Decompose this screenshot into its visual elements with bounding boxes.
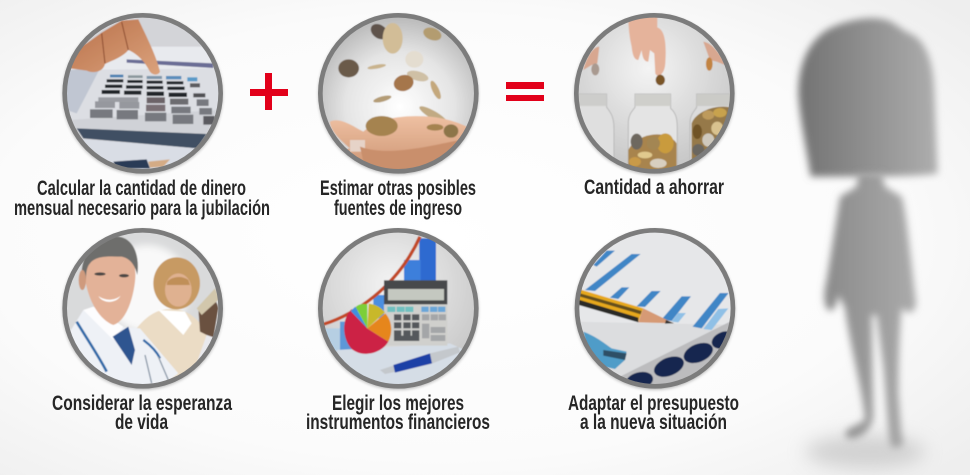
label: considerar: de vida <box>115 410 169 434</box>
label: adaptar <box>568 391 739 434</box>
label: adaptar: Adaptar el presupuesto <box>568 391 739 415</box>
photo: hands dropping coins into jars <box>573 10 740 177</box>
panel: cantidad a ahorrar <box>573 10 740 199</box>
panel: adaptar el presupuesto a la nueva situación <box>568 227 740 434</box>
label: calcular <box>14 176 270 220</box>
icon: equals sign <box>506 82 544 101</box>
panel: calcular la cantidad de dinero <box>14 10 270 220</box>
label: estimar <box>320 176 476 220</box>
label: cantidad a ahorrar: Cantidad a ahorrar <box>584 175 724 199</box>
label: calcular: Calcular la cantidad de dinero <box>37 176 246 200</box>
label: estimar: Estimar otras posibles <box>320 176 476 200</box>
photo: falling coins over hands <box>317 10 483 177</box>
icon: blurred silhouette of a person <box>798 18 938 468</box>
photo: bar chart, pencil and calculator keys <box>573 227 740 393</box>
panel: estimar otras posibles fuentes de ingreso <box>317 10 483 220</box>
label: elegir <box>306 391 490 434</box>
photo: doctor and older woman <box>60 225 227 395</box>
label: elegir: Elegir los mejores <box>332 391 464 415</box>
label: elegir: instrumentos financieros <box>306 410 490 434</box>
panel: considerar la esperanza de vida <box>52 225 233 434</box>
label: estimar: fuentes de ingreso <box>334 196 462 220</box>
panel: elegir los mejores instrumentos financieros <box>306 227 490 434</box>
label: considerar: Considerar la esperanza <box>52 391 233 415</box>
label: adaptar: a la nueva situación <box>580 410 727 434</box>
icon: plus sign <box>250 73 288 110</box>
photo: calculator, pie chart, bars and pen <box>317 227 483 393</box>
label: calcular: mensual necesario para la jubilación <box>14 196 270 220</box>
label: considerar <box>52 391 233 434</box>
photo: calculator and hand <box>60 10 227 183</box>
